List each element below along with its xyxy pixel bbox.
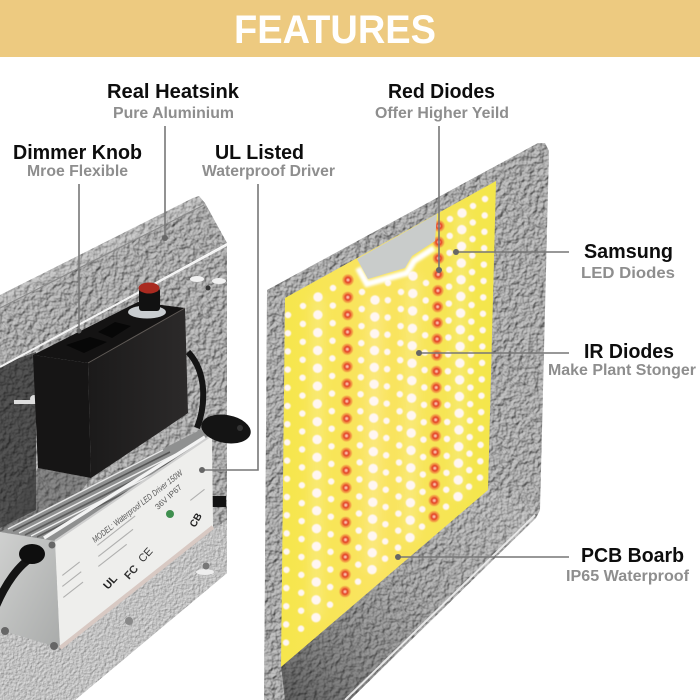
callout: PCB Boarb: PCB Boarb [581,545,684,567]
header banner [0,0,700,57]
callout: Dimmer Knob [13,142,142,334]
callout: Red Diodes: Red Diodes [388,81,495,103]
switch two [98,322,131,338]
callout: UL Listed: Waterproof Driver [202,163,335,180]
LED driver [0,411,253,650]
cable from dimmer box [188,352,203,428]
driver fins [0,430,212,541]
callout: Real Heatsink: Real Heatsink [107,81,240,103]
red diode column left [345,280,348,592]
callout: Real Heatsink [107,81,240,241]
callout: PCB Boarb: IP65 Waterproof [566,568,690,585]
cable grommet [19,544,45,564]
callout: Red Diodes [375,81,509,273]
small spec lines [62,489,205,598]
model text: MODEL: Waterproof LED Driver 150W [90,467,185,545]
power cable [0,556,34,606]
callout: IR Diodes: Make Plant Stonger [548,362,696,379]
screws [1,542,58,650]
callout: UL Listed [199,142,335,473]
back of lamp: heatsink, dimmer box and driver [0,196,253,700]
callout: Dimmer Knob: Dimmer Knob [13,142,142,164]
driver end cap [0,532,60,648]
bright sticker patch [357,214,437,284]
callout: PCB Boarb [395,545,690,585]
white LED glow [316,213,462,618]
callout: Samsung [453,241,675,282]
heatsink flange [0,196,227,367]
callout: Real Heatsink: Pure Aluminium [113,105,234,122]
heatsink body [0,245,227,700]
yellow LED board [281,181,496,667]
white LED diodes [286,199,485,643]
driver label face [55,435,213,648]
red diode column right [434,226,439,517]
green badge [166,510,174,518]
CB mark: CB [188,511,205,530]
callout: Red Diodes: Offer Higher Yeild [375,105,509,122]
callout: IR Diodes: IR Diodes [584,341,674,363]
callout: Samsung: Samsung [584,241,673,263]
switch one [66,337,107,353]
front of lamp: reflector and LED board [264,143,549,700]
FC mark: FC [122,563,141,582]
CE mark: CE [136,546,155,565]
reflector frame [264,143,549,700]
title: FEATURES [234,8,436,52]
black dimmer box [33,282,188,478]
cable gland [199,411,253,447]
callout: UL Listed: UL Listed [215,142,304,164]
dimmer knob [128,282,166,318]
callout: IR Diodes [416,341,696,379]
callout: Dimmer Knob: Mroe Flexible [27,163,128,180]
hanging hardware bright spots [14,276,226,404]
spec block: 36V IP67 [153,482,184,511]
UL mark: UL [101,573,120,592]
callout: Samsung: LED Diodes [581,265,675,282]
